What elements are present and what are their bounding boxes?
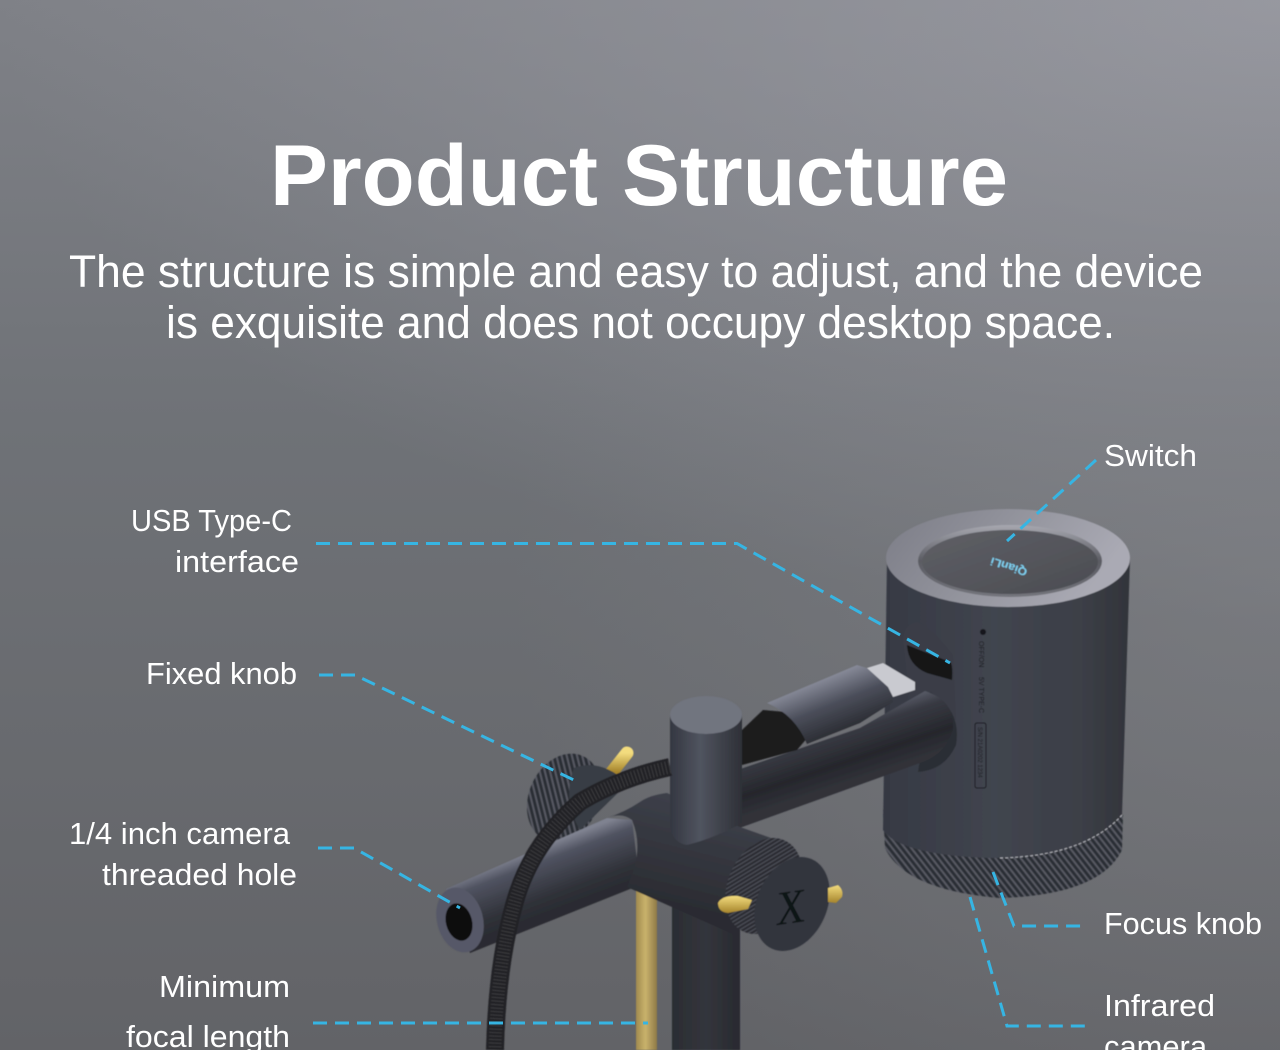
- label: camera threaded hole: 1/4 inch camera: [69, 816, 291, 851]
- label: USB Type-C interface: interface: [175, 544, 299, 579]
- leader: fixed knob: [319, 675, 578, 782]
- braided cable: [495, 767, 670, 1050]
- cylinder body: [883, 558, 1130, 858]
- upright post: [670, 696, 742, 845]
- top rim: [886, 509, 1130, 607]
- gold support rod: [636, 885, 657, 1050]
- body markings: 5V TYPE-C: [977, 677, 984, 713]
- leader: camera hole: [318, 848, 460, 908]
- logo: QianLi: [989, 554, 1029, 578]
- label: fixed knob: Fixed knob: [146, 656, 297, 691]
- label: focus knob: Focus knob: [1104, 906, 1262, 941]
- vertical pole: [672, 880, 740, 1050]
- USB-C plug: [742, 663, 915, 765]
- body markings: S/N 21A0202 1234: [976, 727, 982, 778]
- front knob: [711, 826, 844, 963]
- label: USB Type-C interface: [131, 503, 299, 579]
- label: switch: Switch: [1104, 438, 1197, 473]
- tube socket: [918, 692, 957, 772]
- leader: switch: [1007, 460, 1096, 541]
- label: camera threaded hole: threaded hole: [102, 857, 297, 892]
- USB port opening: [907, 645, 952, 680]
- switch recess: [918, 525, 1102, 597]
- subtitle: The structure is simple and easy to adjust, and the device: [69, 246, 1203, 297]
- cross tube: [446, 818, 640, 953]
- front knob: X: [770, 879, 810, 936]
- back gold pin: [612, 753, 627, 772]
- knurled focus ring: [883, 810, 1123, 898]
- body markings: OFF/ON: [977, 641, 984, 667]
- subtitle: is exquisite and does not occupy desktop space.: [166, 297, 1115, 348]
- ring edge highlight: [1000, 815, 1122, 858]
- fixed knob: [513, 742, 628, 854]
- subtitle: [69, 246, 1203, 348]
- label: USB Type-C interface: USB Type-C: [131, 503, 292, 538]
- label: infrared camera: Infrared: [1104, 988, 1215, 1023]
- USB port recess: [903, 622, 956, 720]
- label: minimum focal length: Minimum: [159, 969, 290, 1004]
- label: camera threaded hole: [69, 816, 297, 892]
- front gold pins: [718, 896, 752, 913]
- label: infrared camera: [1104, 988, 1215, 1050]
- label: minimum focal length: [126, 969, 290, 1050]
- camera cylinder: [883, 509, 1130, 898]
- leader: infrared camera: [970, 897, 1088, 1026]
- main arm tube: [720, 691, 953, 835]
- body markings: [975, 629, 986, 788]
- leader: USB Type-C: [316, 544, 950, 663]
- leader: minimum focal length: [313, 1022, 648, 1024]
- tube end cap with threaded hole: [429, 882, 491, 958]
- product illustration: [429, 509, 1130, 1050]
- T joint: [607, 793, 785, 935]
- title: Product Structure: [270, 128, 1008, 224]
- leader: focus knob: [993, 872, 1088, 926]
- lower gold pin tip: [527, 843, 540, 858]
- switch disc: [922, 530, 1098, 594]
